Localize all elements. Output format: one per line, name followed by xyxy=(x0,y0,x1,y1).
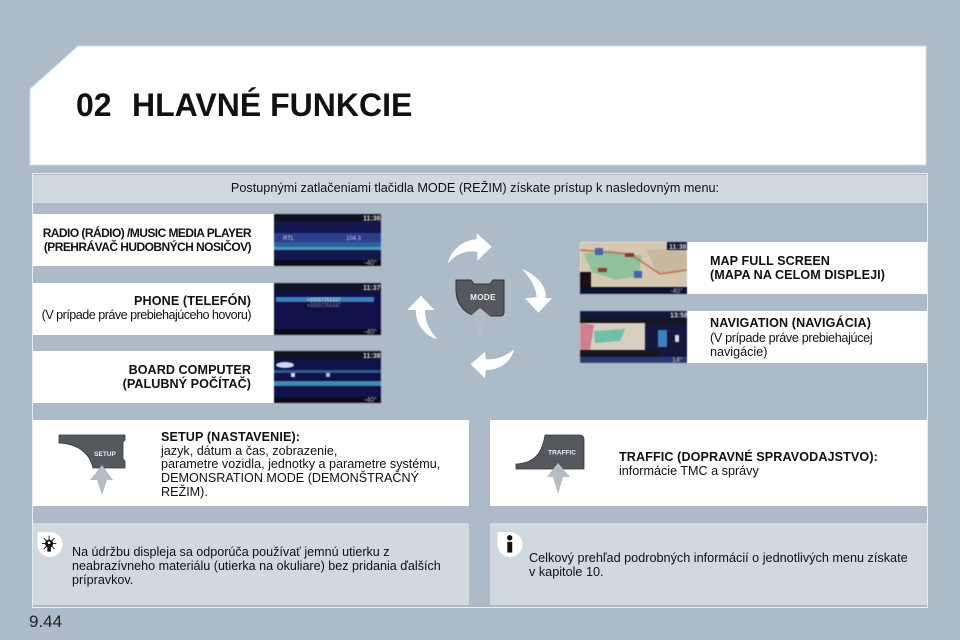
menu row: radio xyxy=(33,214,381,266)
info text: Celkový prehľad podrobných informácií o jednotlivých menu získate xyxy=(529,551,908,565)
navigation label: NAVIGATION (NAVIGÁCIA) xyxy=(710,316,871,330)
header panel xyxy=(30,46,926,166)
setup text: REŽIM). xyxy=(161,485,208,499)
info text xyxy=(529,551,908,579)
radio label: (PREHRÁVAČ HUDOBNÝCH NOSIČOV) xyxy=(44,240,251,254)
board computer screen: 11:38 xyxy=(363,353,381,360)
radio screen: 11:36 xyxy=(363,216,381,222)
radio label: RADIO (RÁDIO) /MUSIC MEDIA PLAYER xyxy=(43,226,251,240)
board computer screen: -40° xyxy=(364,396,377,404)
radio screen: RTL xyxy=(283,236,295,242)
tip text xyxy=(72,545,441,587)
setup key icon xyxy=(58,434,126,495)
menu row: phone xyxy=(33,283,381,335)
page number: 9.44 xyxy=(29,612,62,631)
setup key icon: SETUP xyxy=(94,451,116,458)
phone screen xyxy=(273,282,382,336)
phone label xyxy=(42,293,251,322)
board computer label xyxy=(123,363,251,391)
navigation screen: 13:58 xyxy=(670,312,688,320)
phone screen: +33157251337 xyxy=(307,298,341,304)
map screen xyxy=(579,241,688,295)
arrow: bottom xyxy=(471,349,514,378)
traffic text: informácie TMC a správy xyxy=(619,464,759,478)
arrow: left xyxy=(407,296,437,339)
setup text: DEMONSRATION MODE (DEMONŠTRAČNÝ xyxy=(161,471,419,485)
mode button xyxy=(456,280,504,316)
traffic key icon: TRAFFIC xyxy=(548,450,576,456)
main content frame xyxy=(32,173,928,608)
setup text xyxy=(160,430,440,499)
map label xyxy=(710,254,885,282)
phone label: (V prípade práve prebiehajúceho hovoru) xyxy=(42,308,251,322)
phone label: PHONE (TELEFÓN) xyxy=(134,294,251,308)
radio screen xyxy=(273,213,382,267)
tip panel: display care xyxy=(33,523,469,605)
phone screen: -40° xyxy=(364,328,377,336)
intro text: Postupnými zatlačeniami tlačidla MODE (REŽIM) získate prístup k nasledovným menu: xyxy=(231,181,719,195)
navigation label: (V prípade práve prebiehajúcej xyxy=(710,330,872,344)
icon: information xyxy=(498,532,522,557)
setup text: SETUP (NASTAVENIE): xyxy=(161,430,300,444)
traffic text xyxy=(619,450,878,478)
press arrow xyxy=(468,308,492,339)
board computer label: (PALUBNÝ POČÍTAČ) xyxy=(123,377,251,391)
board computer label: BOARD COMPUTER xyxy=(129,363,251,377)
navigation label: navigácie) xyxy=(710,345,767,359)
mode label: MODE xyxy=(470,293,496,302)
navigation screen: 14° xyxy=(672,356,683,364)
arrow: top xyxy=(448,233,492,263)
map screen: -40° xyxy=(670,287,683,295)
map label: MAP FULL SCREEN xyxy=(710,254,830,268)
navigation label xyxy=(710,316,872,359)
setup text: parametre vozidla, jednotky a parametre systému, xyxy=(161,457,440,471)
traffic text: TRAFFIC (DOPRAVNÉ SPRAVODAJSTVO): xyxy=(619,450,878,464)
tip text: prípravkov. xyxy=(72,573,133,587)
radio screen: -40° xyxy=(364,259,377,267)
tip panel: more information xyxy=(490,523,927,605)
menu row: map full screen xyxy=(580,242,927,294)
menu row: board computer xyxy=(33,351,381,403)
info text: v kapitole 10. xyxy=(529,565,604,579)
cycle arrows and mode button xyxy=(408,233,552,378)
tip text: neabrazívneho materiálu (utierka na okuliare) bez pridania ďalších xyxy=(72,559,441,573)
chapter number: 02 xyxy=(76,87,112,123)
arrow: right xyxy=(522,269,552,313)
board computer screen xyxy=(273,350,382,404)
radio label xyxy=(43,226,252,254)
phone screen: 11:37 xyxy=(363,285,381,292)
menu row: navigation xyxy=(580,311,927,363)
setup panel xyxy=(33,420,469,506)
radio screen: 104.3 xyxy=(346,236,362,242)
tip text: Na údržbu displeja sa odporúča používať jemnú utierku z xyxy=(72,545,390,559)
setup text: jazyk, dátum a čas, zobrazenie, xyxy=(161,444,337,458)
intro band xyxy=(33,175,927,203)
icon: light bulb xyxy=(38,532,62,557)
traffic key icon xyxy=(516,434,584,494)
navigation screen xyxy=(579,310,688,364)
map label: (MAPA NA CELOM DISPLEJI) xyxy=(710,268,885,282)
map screen: 11:38 xyxy=(669,244,687,251)
title: HLAVNÉ FUNKCIE xyxy=(132,87,412,123)
traffic panel xyxy=(490,420,927,506)
phone screen: +33157251337 xyxy=(307,303,341,309)
